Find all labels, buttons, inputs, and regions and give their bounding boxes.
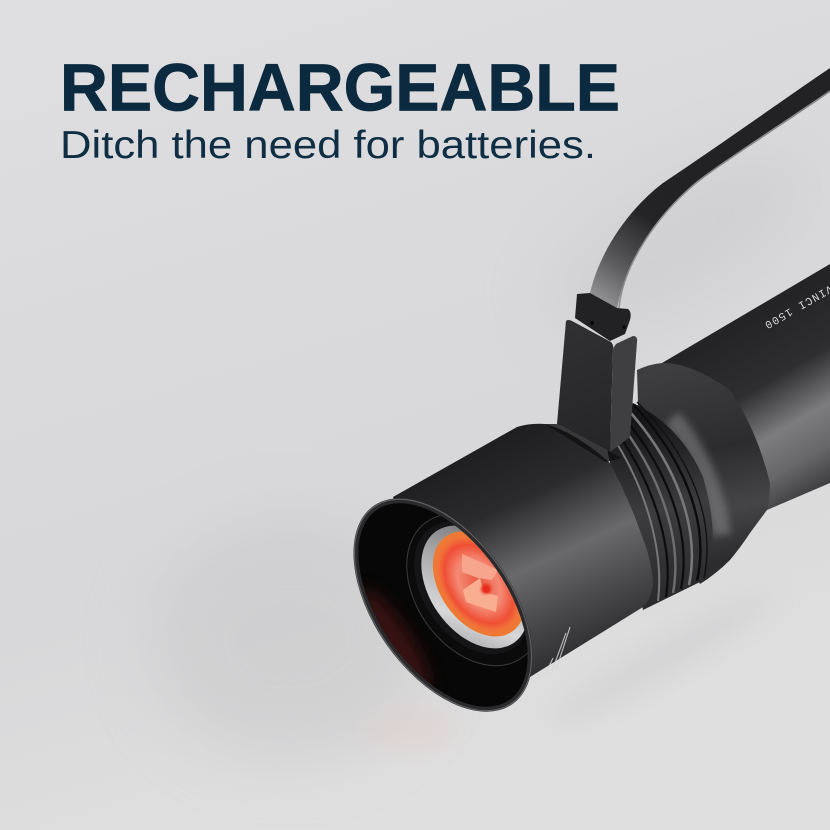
inner bezel [358,503,528,707]
head barrel [393,424,653,677]
fine print [546,627,570,673]
main body [662,264,830,510]
rim [317,466,569,744]
cable edge highlight [619,91,830,308]
collar [637,363,770,584]
plug side face [610,336,637,452]
led emitter [462,554,498,612]
lens assembly [406,516,528,666]
rim highlight [318,468,568,742]
subtitle: Ditch the need for batteries. [60,124,596,167]
title: RECHARGEABLE [60,50,620,126]
plug neck [575,293,631,341]
flat cable [590,68,830,310]
threaded section [605,402,713,610]
plug shadow on head [545,424,622,462]
USB cable [557,68,830,452]
flashlight [354,264,830,712]
usb plug [557,320,613,452]
